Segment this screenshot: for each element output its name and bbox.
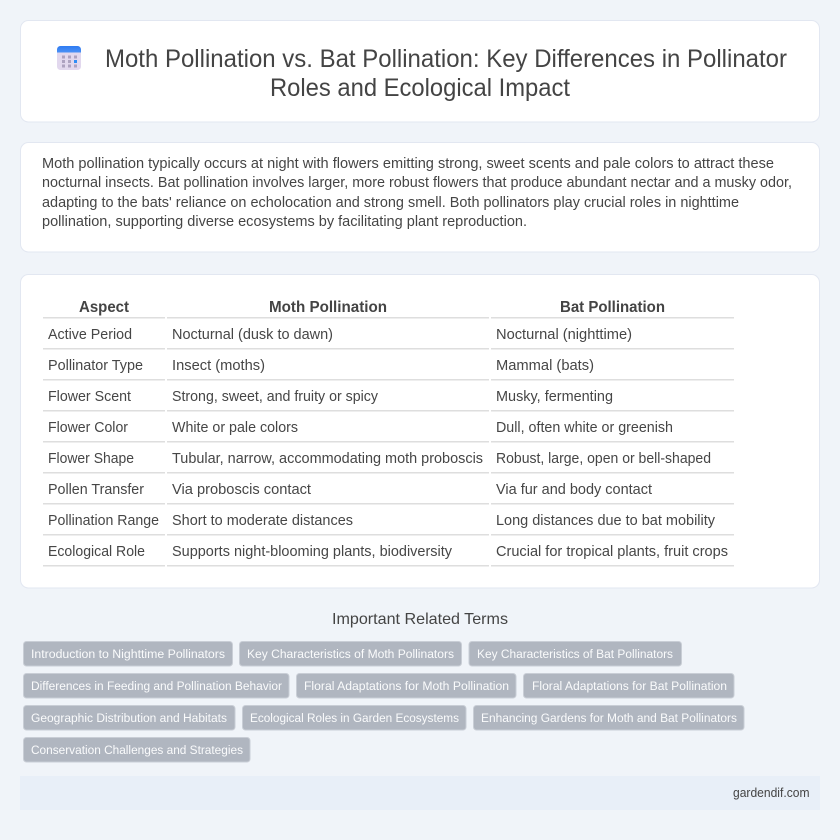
table header row: Aspect	[79, 299, 130, 316]
table header row: Moth Pollination	[269, 299, 387, 316]
chip	[474, 706, 744, 730]
table row: active period: Active Period	[48, 327, 132, 343]
chip: Ecological Roles in Garden Ecosystems	[250, 711, 459, 725]
table row: pollen transfer	[43, 482, 734, 504]
table row: flower color: Flower Color	[48, 420, 128, 436]
panel: comparison table	[20, 274, 820, 588]
table row: flower scent: Strong, sweet, and fruity or spicy	[172, 389, 379, 405]
table row: ecological role: Crucial for tropical plants, fruit crops	[496, 544, 728, 560]
footer bar: gardendif.com	[733, 786, 810, 800]
table row: flower color: White or pale colors	[172, 420, 298, 436]
table row: pollinator type: Pollinator Type	[48, 358, 143, 374]
chip: Enhancing Gardens for Moth and Bat Pollinators	[481, 711, 737, 725]
table row: flower scent	[43, 389, 734, 412]
table row: active period: Nocturnal (dusk to dawn)	[172, 327, 333, 343]
table row: flower shape: Robust, large, open or bell-shaped	[496, 451, 711, 467]
chip: Key Characteristics of Bat Pollinators	[477, 647, 673, 661]
icon: calendar	[57, 46, 81, 70]
chip	[242, 706, 466, 730]
table row: pollen transfer: Via proboscis contact	[172, 482, 311, 498]
chip: Differences in Feeding and Pollination Behavior	[31, 679, 282, 693]
table row: flower shape	[43, 451, 734, 474]
heading: important related terms: Important Related Terms	[332, 611, 508, 628]
table row: pollinator type: Mammal (bats)	[496, 358, 594, 374]
table row: flower color: Dull, often white or greenish	[496, 420, 673, 436]
chip: Floral Adaptations for Moth Pollination	[304, 679, 509, 693]
title: Moth Pollination vs. Bat Pollination: Key Differences in Pollinator	[105, 45, 787, 73]
table row: flower shape: Flower Shape	[48, 451, 134, 467]
table header row	[43, 299, 734, 318]
table row: active period	[43, 327, 734, 350]
table row: flower scent: Flower Scent	[48, 389, 131, 405]
table row: pollinator type: Insect (moths)	[172, 358, 265, 374]
table row: ecological role	[43, 544, 734, 566]
table row: pollen transfer: Pollen Transfer	[48, 482, 144, 498]
footer bar	[20, 776, 820, 810]
table row: flower color	[43, 420, 734, 442]
panel: introduction paragraph	[20, 142, 820, 252]
table header row: Bat Pollination	[560, 299, 665, 316]
table row: flower scent: Musky, fermenting	[496, 389, 613, 405]
table row: flower shape: Tubular, narrow, accommodating moth proboscis	[172, 451, 483, 467]
title	[105, 45, 787, 102]
panel: title header	[20, 20, 820, 122]
related terms chips	[24, 642, 744, 762]
title: Roles and Ecological Impact	[270, 74, 570, 102]
chip	[24, 642, 232, 666]
table row: ecological role: Ecological Role	[48, 544, 145, 560]
panel: introduction paragraph: adapting to the bats' reliance on echolocation and strong smell. Both pollinators play crucial roles in nighttime	[42, 195, 739, 211]
table row: pollination range: Long distances due to bat mobility	[496, 513, 716, 529]
table row: pollination range	[43, 513, 734, 536]
table row: pollinator type	[43, 358, 734, 380]
chip: Introduction to Nighttime Pollinators	[31, 647, 225, 661]
chip	[240, 642, 462, 666]
chip	[24, 706, 235, 730]
chip	[24, 738, 250, 762]
chip: Key Characteristics of Moth Pollinators	[247, 647, 454, 661]
panel: introduction paragraph: Moth pollination typically occurs at night with flowers emitting strong, sweet scents and pale colors to attract these	[42, 156, 774, 172]
chip	[469, 642, 682, 666]
table row: ecological role: Supports night-blooming plants, biodiversity	[172, 544, 453, 560]
chip: Floral Adaptations for Bat Pollination	[532, 679, 727, 693]
panel: introduction paragraph: pollination, supporting diverse ecosystems by facilitating plant reproduction.	[42, 214, 527, 230]
panel: introduction paragraph: nocturnal insects. Bat pollination involves larger, more robust flowers that produce abundant nectar and a musky odor,	[42, 175, 792, 191]
chip	[24, 674, 289, 698]
chip: Conservation Challenges and Strategies	[31, 743, 243, 757]
table row: pollination range: Pollination Range	[48, 513, 159, 529]
table row: pollen transfer: Via fur and body contact	[496, 482, 652, 498]
chip	[296, 674, 516, 698]
table row: pollination range: Short to moderate distances	[172, 513, 353, 529]
table row: active period: Nocturnal (nighttime)	[496, 327, 632, 343]
chip: Geographic Distribution and Habitats	[31, 711, 227, 725]
chip	[524, 674, 734, 698]
